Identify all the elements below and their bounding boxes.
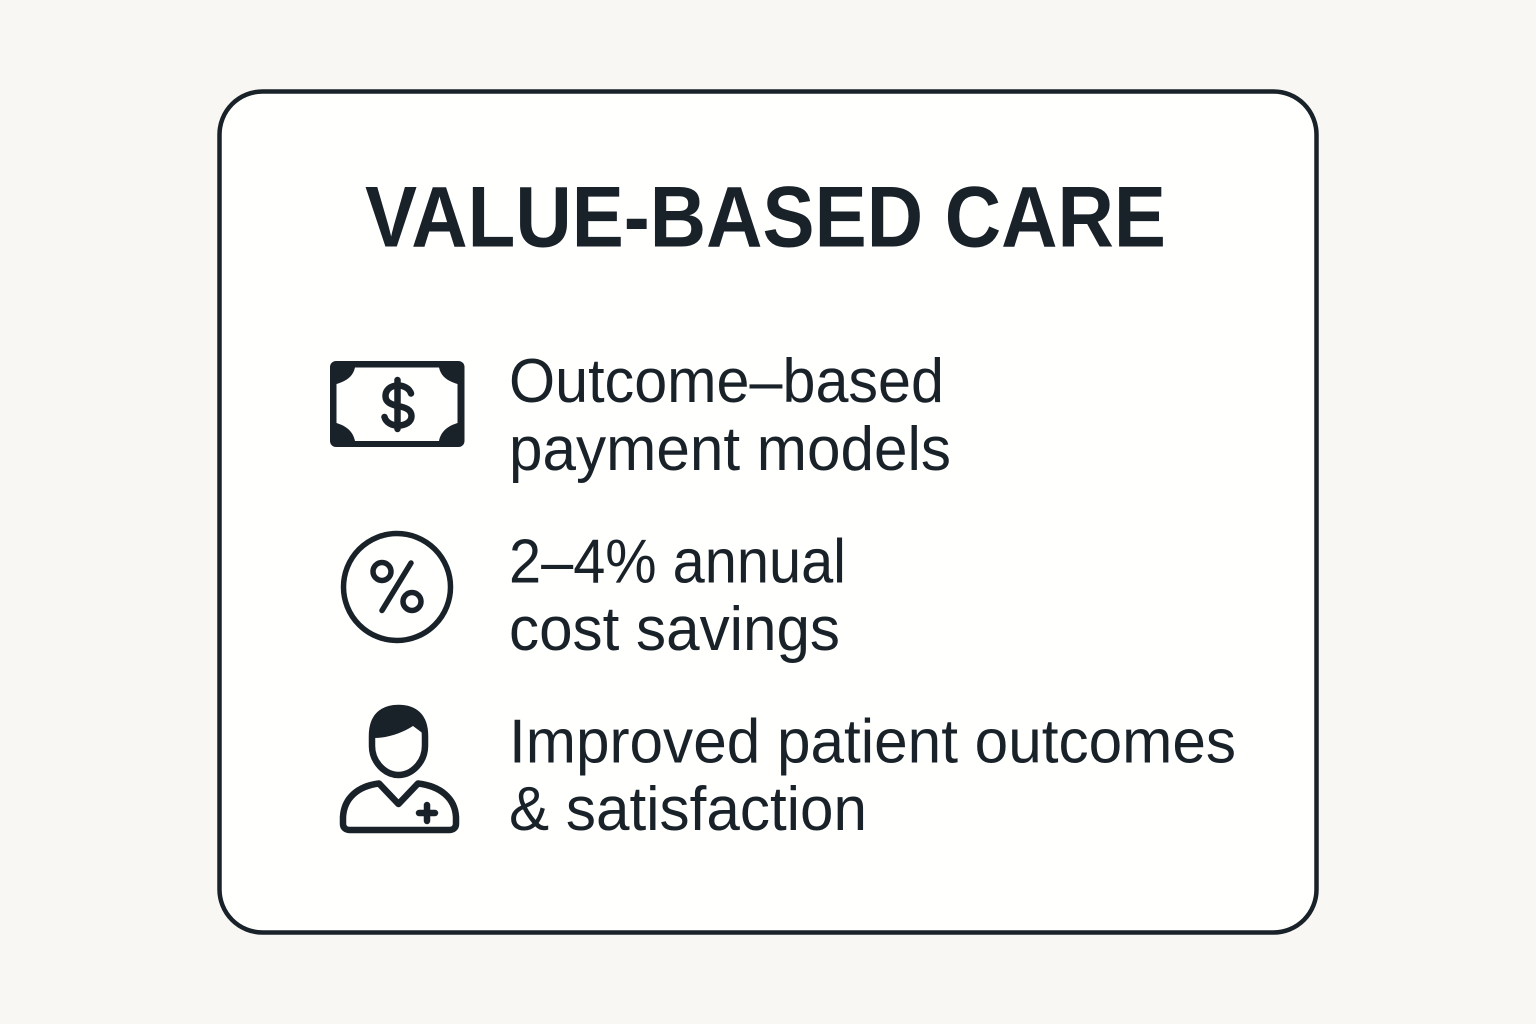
panel: value-based care card	[220, 92, 1316, 932]
text: improved patient outcomes and satisfaction: Improved patient outcomes	[509, 707, 1236, 776]
icon: dollar bill	[330, 361, 464, 447]
text: 2-4% annual cost savings: 2–4% annual	[509, 527, 846, 596]
text: 2-4% annual cost savings	[509, 527, 846, 664]
icon: percent circle	[344, 534, 450, 640]
text: improved patient outcomes and satisfaction: & satisfaction	[509, 775, 867, 844]
text: 2-4% annual cost savings: cost savings	[509, 595, 840, 664]
text: outcome-based payment models	[509, 347, 951, 484]
title: VALUE-BASED CARE	[365, 170, 1166, 266]
text: outcome-based payment models: payment models	[509, 415, 951, 484]
text: outcome-based payment models: Outcome–based	[509, 347, 944, 416]
icon: clinician with medical cross	[343, 705, 456, 830]
text: improved patient outcomes and satisfaction	[509, 707, 1236, 844]
